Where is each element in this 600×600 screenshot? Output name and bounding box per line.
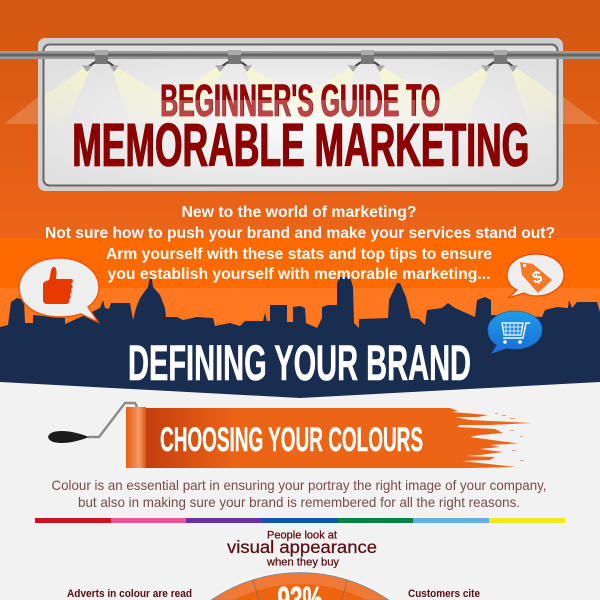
sign shadow: [110, 182, 490, 200]
spotlight beams: [45, 67, 556, 125]
left stat label: Adverts in colour are read: [67, 588, 192, 600]
body text: Colour is an essential part in ensuring your portray the right image of your company,: [52, 477, 546, 493]
speech bubble: thumbs up: [19, 258, 99, 322]
lamp rail: [0, 51, 600, 59]
speech bubble: price tag: $: [530, 267, 545, 288]
visual appearance heading: People look at: [267, 530, 337, 542]
intro text: Arm yourself with these stats and top tips to ensure: [106, 246, 492, 263]
visual appearance heading: [227, 530, 377, 568]
intro text: Not sure how to push your brand and make your services stand out?: [45, 225, 555, 242]
billboard sign: [38, 38, 563, 191]
paint roller: [126, 407, 146, 468]
background: orange bands: [0, 0, 600, 348]
body text: but also in making sure your brand is remembered for all the right reasons.: [78, 494, 520, 510]
spotlight glow outside the sign: [4, 97, 600, 124]
paint stroke banner: [146, 408, 532, 468]
speech bubble: price tag: [507, 254, 564, 298]
visual appearance heading: visual appearance: [227, 537, 377, 557]
intro text: [45, 204, 555, 283]
lamps: [82, 50, 518, 72]
speech bubble: shopping cart: [488, 311, 542, 353]
city skyline banner: [0, 272, 600, 398]
intro text: New to the world of marketing?: [182, 204, 416, 221]
body text: [52, 477, 546, 510]
visual appearance heading: when they buy: [266, 556, 340, 568]
right stat label: Customers cite: [408, 588, 480, 600]
intro text: you establish yourself with memorable marketing...: [108, 266, 490, 283]
paint roller handle: [48, 403, 137, 443]
semicircle chart: [208, 571, 392, 600]
title line 1: [162, 84, 440, 117]
rainbow divider: [35, 518, 565, 523]
